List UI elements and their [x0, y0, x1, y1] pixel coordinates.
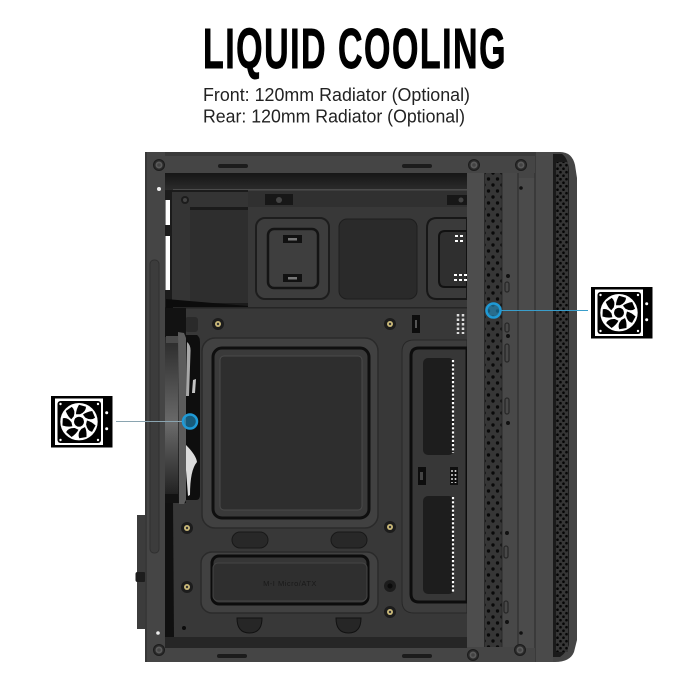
- right embossed panel: [402, 340, 467, 613]
- subtitle: radiator support: [203, 85, 470, 126]
- tray horizontal seam: [173, 307, 467, 308]
- icon: radiator fan, left: [51, 396, 112, 448]
- lower embossed rectangle: [201, 552, 378, 613]
- lower embossed rectangle: M-I Micro/ATX: [263, 579, 317, 588]
- bottom rail: [165, 644, 535, 662]
- bottom half-round feet: [237, 618, 361, 633]
- rear-facing pillar and front strips: [467, 152, 553, 662]
- upper tray embossed square: [256, 218, 329, 299]
- front fan: [165, 308, 200, 504]
- tray standoffs and fittings: [181, 314, 463, 630]
- subtitle: radiator support: Rear: 120mm Radiator (Optional): [203, 106, 465, 126]
- lower left dark bevel: [165, 500, 174, 637]
- black perforated front edge: [553, 154, 569, 657]
- case body: [145, 152, 577, 662]
- upper tray dark panel: [339, 219, 417, 299]
- drive bay: [165, 190, 248, 308]
- motherboard tray: [173, 190, 467, 637]
- callout: rear radiator position, left: [116, 414, 197, 428]
- left rail: [145, 152, 165, 662]
- large embossed square: [202, 338, 378, 528]
- title: LIQUID COOLING: [203, 17, 507, 80]
- tray top strip: [173, 189, 467, 207]
- upper right embossed panel: [427, 218, 467, 299]
- cable oval slots: [232, 532, 367, 548]
- top interior strip: [165, 173, 467, 190]
- left mounting tab: [136, 515, 146, 629]
- bottom-left screw: [154, 644, 164, 656]
- callout: front radiator position, right: [486, 304, 588, 318]
- interior shadow cavity: [165, 173, 467, 647]
- subtitle: radiator support: Front: 120mm Radiator (Optional): [203, 85, 470, 105]
- icon: radiator fan, right: [591, 287, 652, 338]
- PC case, open side view: [136, 152, 577, 662]
- bottom interior band: [165, 637, 467, 648]
- top rail: [145, 152, 535, 173]
- front panel buttons: [504, 186, 523, 635]
